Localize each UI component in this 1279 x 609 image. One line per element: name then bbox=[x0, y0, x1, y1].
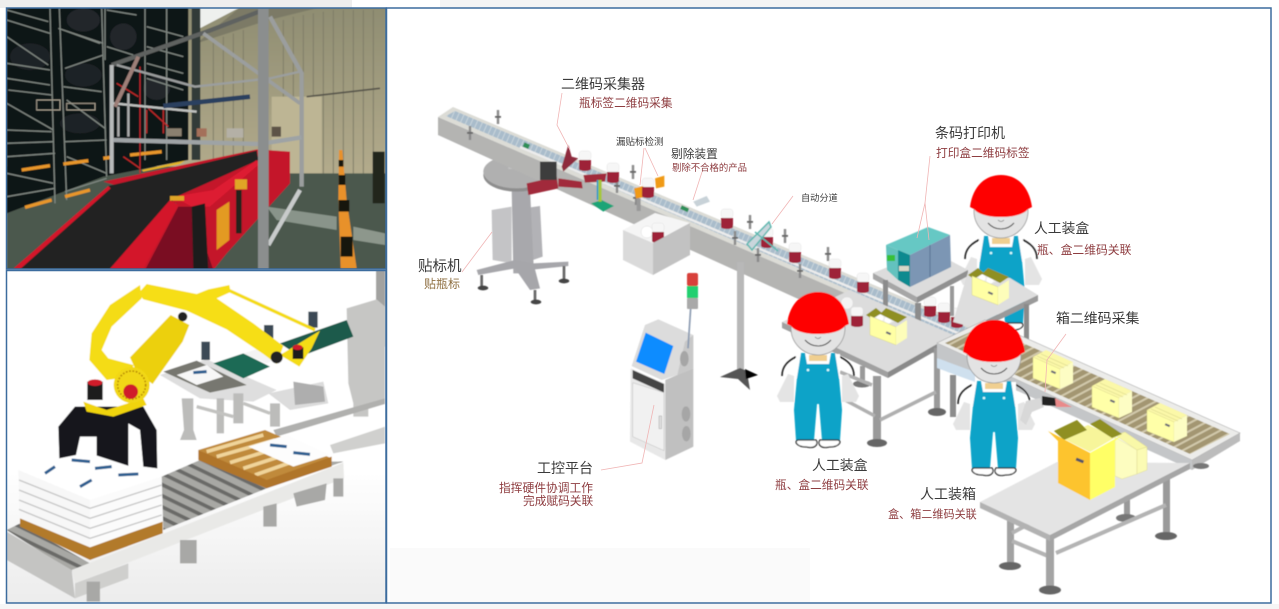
support column bbox=[720, 262, 758, 390]
printer table bbox=[873, 250, 968, 340]
photo: scanner heads bbox=[167, 127, 281, 138]
worker middle bbox=[777, 292, 859, 447]
label: labelling machine bbox=[418, 258, 462, 291]
label: reject device bbox=[671, 147, 747, 173]
photo: yellow black bollard bbox=[338, 150, 385, 268]
handheld scanner bbox=[1020, 396, 1072, 425]
leader lines bbox=[462, 93, 1066, 470]
auto diverter bbox=[747, 222, 778, 251]
label: reject device: 剔除装置 bbox=[671, 147, 718, 161]
label: manual boxing top: 人工装盒 bbox=[1034, 220, 1089, 236]
photo: yellow robot arm bbox=[83, 284, 320, 417]
label: industrial control platform: 指挥硬件协调工作 bbox=[499, 481, 593, 495]
stack light bbox=[687, 273, 698, 309]
photo: warehouse wall bbox=[154, 8, 386, 174]
photo: robot joints and red caps bbox=[87, 312, 303, 400]
label: manual cartoning: 盒、箱二维码关联 bbox=[888, 507, 977, 521]
label: QR code collector: 瓶标签二维码采集 bbox=[579, 96, 673, 110]
label: industrial control platform bbox=[499, 460, 593, 508]
open boxes bbox=[968, 268, 1009, 305]
photo: wooden pallets bbox=[20, 430, 332, 560]
label: manual boxing top bbox=[1034, 220, 1132, 257]
label: missing label detection: 漏贴标检测 bbox=[616, 136, 664, 148]
label: manual boxing middle: 瓶、盒二维码关联 bbox=[775, 478, 869, 492]
label: manual boxing middle bbox=[775, 457, 869, 492]
photo: tyre racking bbox=[7, 7, 188, 213]
photo: red conveyor body bbox=[13, 149, 290, 270]
panel: conveyor photo bbox=[7, 7, 387, 270]
label: industrial control platform: 完成赋码关联 bbox=[523, 494, 593, 508]
label: reject device: 剔除不合格的产品 bbox=[672, 162, 747, 173]
label: labelling machine: 贴标机 bbox=[418, 258, 462, 275]
label: manual cartoning bbox=[888, 486, 977, 521]
large packing carton bbox=[1048, 419, 1122, 500]
label: QR code collector: 二维码采集器 bbox=[561, 76, 645, 92]
cartons on conveyor bbox=[1033, 350, 1187, 442]
worker lower bbox=[953, 320, 1035, 475]
photo: aluminium gantry frame bbox=[112, 8, 302, 270]
upper bottle conveyor bbox=[438, 107, 985, 365]
panel: production line diagram bbox=[387, 8, 1271, 603]
bottles on conveyor bbox=[579, 151, 963, 328]
labelling machine bbox=[477, 145, 569, 304]
packing table right bbox=[950, 272, 1038, 344]
barcode printers bbox=[886, 227, 951, 287]
packing table lower bbox=[980, 462, 1190, 594]
label: barcode printer: 打印盒二维码标签 bbox=[936, 146, 1030, 160]
photo: black gripper bbox=[58, 407, 157, 468]
labeller head and label station bbox=[523, 142, 710, 212]
label: carton QR collection: 箱二维码采集 bbox=[1056, 310, 1139, 326]
packing table left bbox=[782, 290, 953, 447]
lower carton conveyor bbox=[937, 320, 1240, 470]
label: labelling machine: 贴瓶标 bbox=[424, 277, 460, 291]
worker top right bbox=[960, 175, 1042, 330]
label: barcode printer bbox=[935, 125, 1030, 160]
panel: robot palletizer photo bbox=[6, 270, 386, 603]
label: QR code collector bbox=[561, 76, 673, 110]
photo: background machinery bbox=[160, 270, 385, 453]
label: industrial control platform: 工控平台 bbox=[537, 460, 593, 476]
reject bin bbox=[623, 213, 690, 275]
label: manual boxing middle: 人工装盒 bbox=[812, 457, 868, 473]
photo: white bag stacks bbox=[18, 372, 330, 547]
small cartons stack bbox=[1115, 432, 1147, 479]
label: automatic lane split: 自动分道 bbox=[801, 192, 838, 203]
photo: green floor bbox=[7, 167, 387, 270]
control cabinet bbox=[630, 308, 693, 460]
label: manual boxing top: 瓶、盒二维码关联 bbox=[1037, 243, 1132, 257]
photo: roller conveyor bbox=[7, 460, 344, 602]
label: manual cartoning: 人工装箱 bbox=[920, 486, 976, 502]
label: barcode printer: 条码打印机 bbox=[935, 125, 1005, 141]
